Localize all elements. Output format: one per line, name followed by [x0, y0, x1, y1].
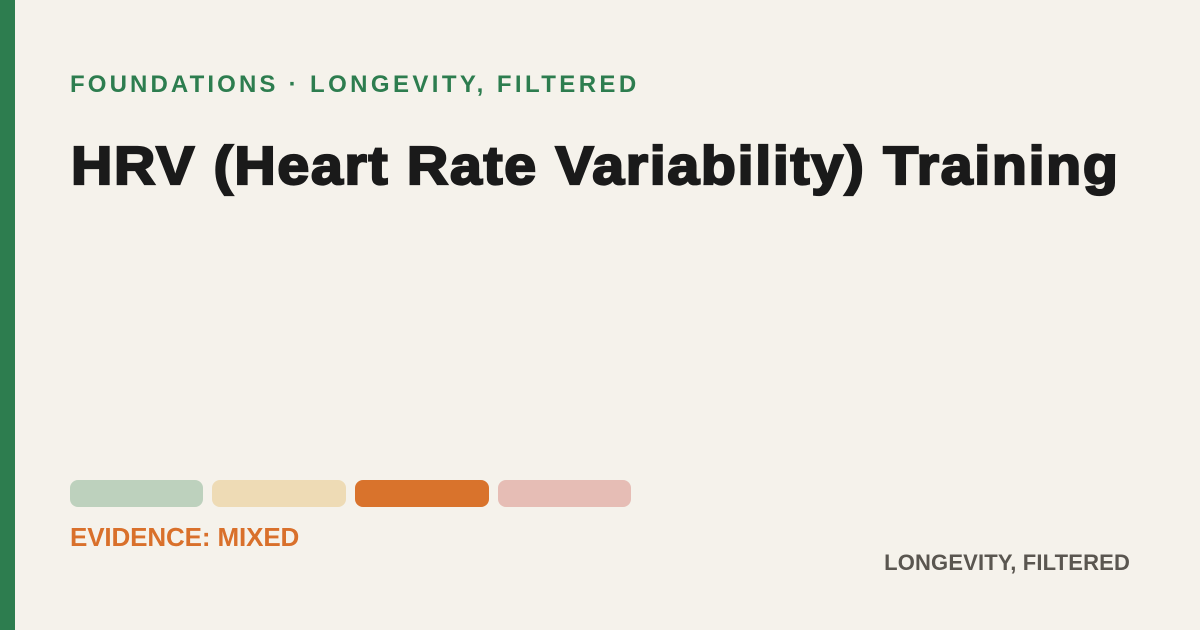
evidence label: EVIDENCE: MIXED — [70, 522, 299, 552]
title: HRV (Heart Rate Variability) Training — [71, 136, 1120, 196]
segment: weak — [498, 480, 631, 507]
segment: strong — [70, 480, 203, 507]
eyebrow label: FOUNDATIONS · LONGEVITY, FILTERED — [70, 71, 640, 98]
segment: moderate — [212, 480, 346, 507]
brand footer: LONGEVITY, FILTERED — [884, 550, 1130, 575]
accent stripe — [0, 0, 15, 630]
segment: mixed (active) — [355, 480, 489, 507]
evidence scale — [70, 480, 631, 507]
